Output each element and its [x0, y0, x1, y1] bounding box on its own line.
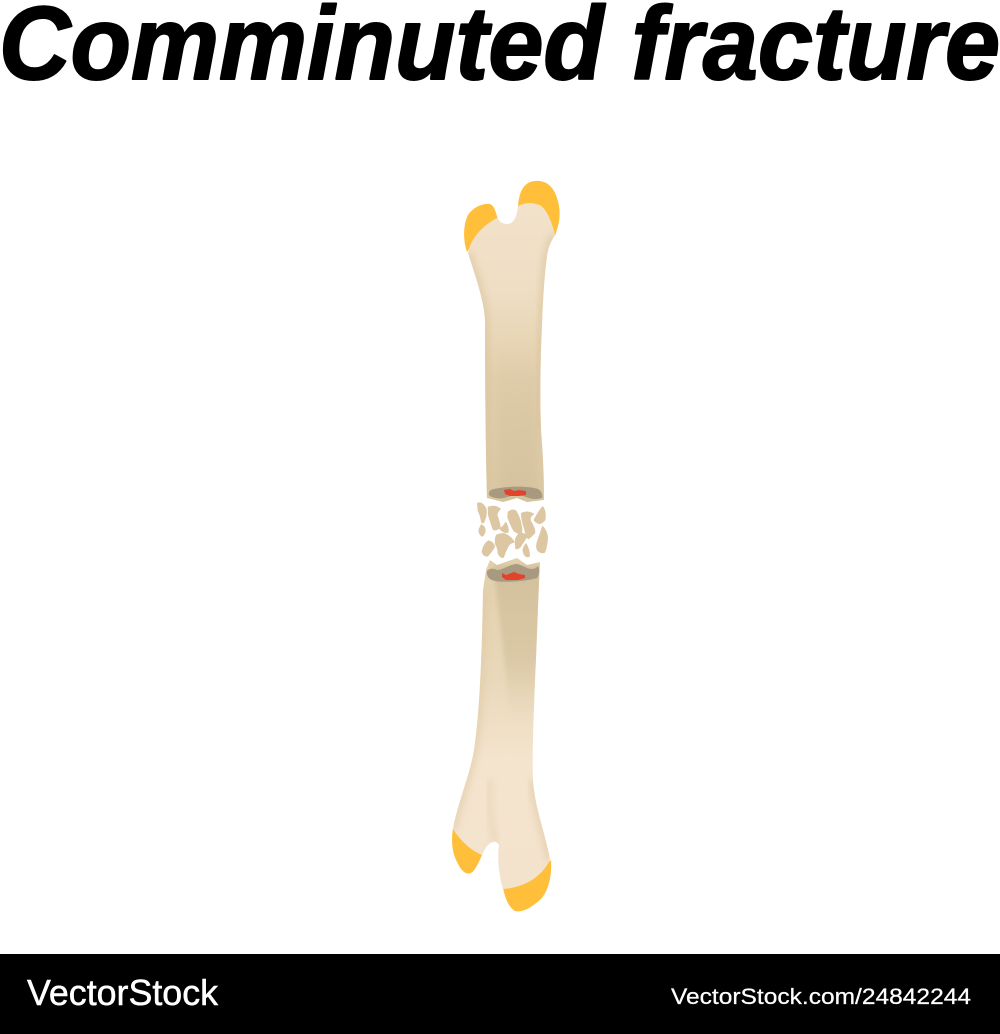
upper bone cartilage: [464, 181, 560, 252]
footer bar: [0, 954, 1000, 1034]
lower marrow: [502, 572, 525, 580]
footer url: VectorStock.com/24842244: [671, 984, 971, 1009]
upper marrow: [504, 489, 526, 496]
lower fracture cross-section: [487, 564, 539, 582]
lower bone cartilage: [452, 828, 551, 911]
upper bone shaft: [468, 203, 555, 502]
footer logo: VectorStock: [27, 972, 219, 1013]
lower bone shaft: [453, 558, 550, 889]
bone illustration: [445, 181, 560, 911]
bone fragments: [478, 503, 547, 557]
upper fracture cross-section: [489, 487, 542, 499]
